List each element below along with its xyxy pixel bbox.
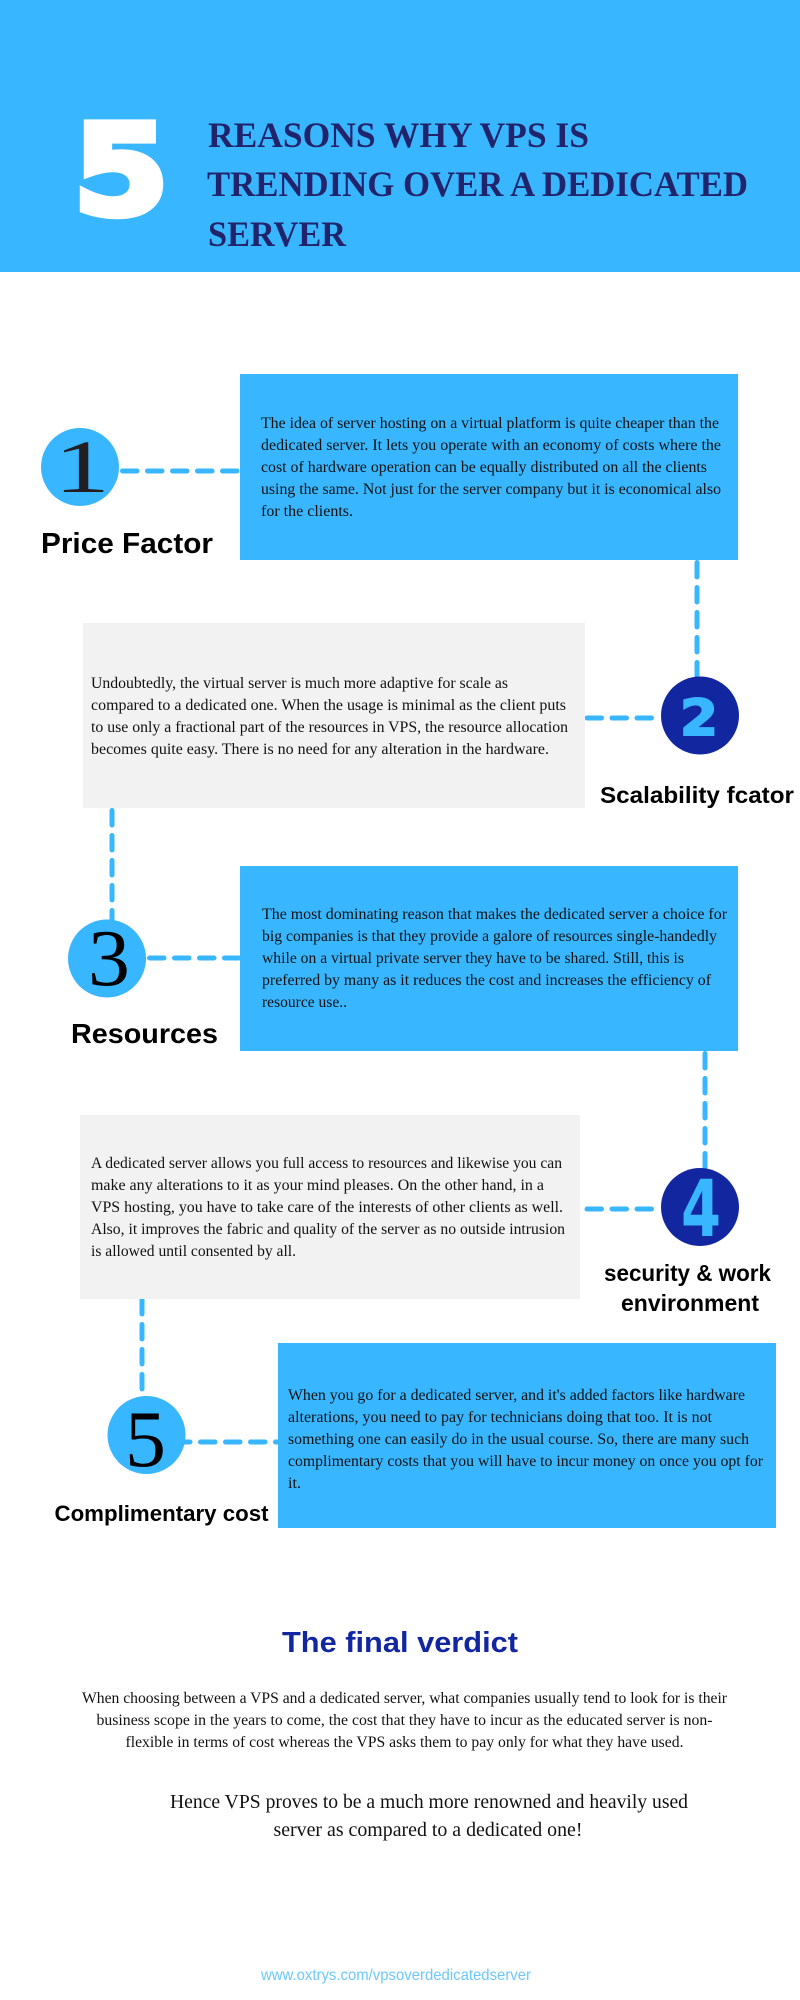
text block: conclusion: Hence VPS proves to be a much more renowned and heavily used [170, 1791, 688, 1813]
text block: verdict paragraph: flexible in terms of cost whereas the VPS asks them to pay only for what they have used. [126, 1734, 684, 1751]
title [207, 115, 748, 254]
heading: Resources [71, 1018, 218, 1049]
panel: price factor text: for the clients. [261, 503, 353, 520]
title: REASONS WHY VPS IS [208, 115, 589, 155]
step 4: security and work environment [604, 1165, 771, 1316]
big number 5: 5 [73, 99, 169, 244]
panel: complimentary cost text: something one can easily do in the usual course. So, there are many such [288, 1431, 749, 1448]
number 4: 4 [681, 1165, 721, 1255]
panel: scalability text: Undoubtedly, the virtual server is much more adaptive for scale as [91, 675, 508, 692]
number 3: 3 [88, 915, 130, 1003]
heading: Scalability fcator [600, 782, 794, 808]
heading: the final verdict: The final verdict [282, 1627, 518, 1659]
text block: verdict paragraph: When choosing between a VPS and a dedicated server, what companies usually tend to look for is their [82, 1690, 728, 1707]
panel: complimentary cost text: it. [288, 1475, 301, 1492]
number 5: 5 [125, 1396, 166, 1484]
panel: security text: Also, it improves the fabric and quality of the server as no outside intrusion [91, 1221, 565, 1238]
panel: price factor text [240, 374, 738, 560]
panel: scalability text: becomes quite easy. There is no need for any alteration in the hardware. [91, 741, 549, 758]
panel: resources text: preferred by many as it reduces the cost and increases the efficiency of [262, 972, 712, 989]
text block: verdict paragraph [82, 1690, 728, 1751]
title: TRENDING OVER A DEDICATED [207, 164, 748, 204]
panel: scalability text: to use only a fractional part of the resources in VPS, the resource allocation [91, 719, 568, 736]
text block: conclusion: server as compared to a dedicated one! [274, 1819, 582, 1841]
heading: Complimentary cost [54, 1501, 269, 1526]
panel: scalability text [83, 623, 585, 808]
step 5: complimentary cost [54, 1396, 269, 1526]
step 1: price factor [41, 426, 213, 560]
connector: box 4 to circle 4 [587, 1206, 652, 1212]
panel: price factor text: dedicated server. It lets you operate with an economy of costs where the [261, 437, 721, 454]
panel: security text: make any alterations to it as your mind pleases. On the other hand, in a [91, 1177, 544, 1194]
panel: security text: A dedicated server allows you full access to resources and likewise you can [91, 1155, 562, 1172]
panel: resources text: big companies is that they provide a galore of resources single-handedly [262, 928, 717, 945]
panel: resources text: while on a virtual private server they have to be shared. Still, this is [262, 950, 684, 967]
panel: price factor text: using the same. Not just for the server company but it is economical also [261, 481, 721, 498]
heading: Price Factor [41, 528, 213, 560]
source url: www.oxtrys.com/vpsoverdedicatedserver [260, 1967, 532, 1984]
step 2: scalability [600, 676, 794, 808]
connector: box 2 to circle 2 [587, 716, 652, 720]
header banner [0, 0, 800, 272]
panel: resources text: resource use.. [262, 994, 347, 1011]
text block: conclusion [170, 1791, 688, 1841]
number 1: 1 [54, 426, 110, 509]
number 2: 2 [680, 689, 718, 747]
panel: security text: VPS hosting, you have to take care of the interests of other clients as well. [91, 1199, 563, 1216]
panel: scalability text: compared to a dedicated one. When the usage is minimal as the client puts [91, 697, 566, 714]
heading: environment [621, 1290, 759, 1316]
panel: complimentary cost text: When you go for a dedicated server, and it's added factors like hardware [288, 1387, 745, 1404]
text block: verdict paragraph: business scope in the years to come, the cost that they have to incur as the educated server is non- [96, 1712, 712, 1729]
panel: resources text [240, 866, 738, 1051]
connector: box 2 to circle 3 [110, 810, 114, 920]
panel: resources text: The most dominating reason that makes the dedicated server a choice for [262, 906, 728, 923]
panel: price factor text: The idea of server hosting on a virtual platform is quite cheaper than the [261, 415, 719, 432]
connector: circle 5 to box 5 [176, 1440, 280, 1444]
panel: price factor text: cost of hardware operation can be equally distributed on all the clients [261, 459, 707, 476]
panel: security text: is allowed until consented by all. [91, 1243, 296, 1260]
panel: complimentary cost text: alterations, you need to pay for technicians doing that too. It is not [288, 1409, 713, 1426]
panel: security text [80, 1115, 580, 1299]
connector: circle 3 to box 3 [150, 956, 240, 960]
step 3: resources [68, 915, 218, 1049]
connector: circle 1 to box 1 [122, 468, 240, 474]
panel: complimentary cost text: complimentary costs that you will have to incur money on once you opt for [288, 1453, 764, 1470]
connector: box 1 to circle 2 [694, 562, 700, 676]
connector: box 3 to circle 4 [702, 1054, 708, 1168]
heading: security & work [604, 1260, 771, 1286]
connector: box 4 to circle 5 [140, 1300, 144, 1390]
panel: complimentary cost text [278, 1343, 776, 1528]
heading [604, 1260, 771, 1316]
title: SERVER [208, 214, 347, 254]
